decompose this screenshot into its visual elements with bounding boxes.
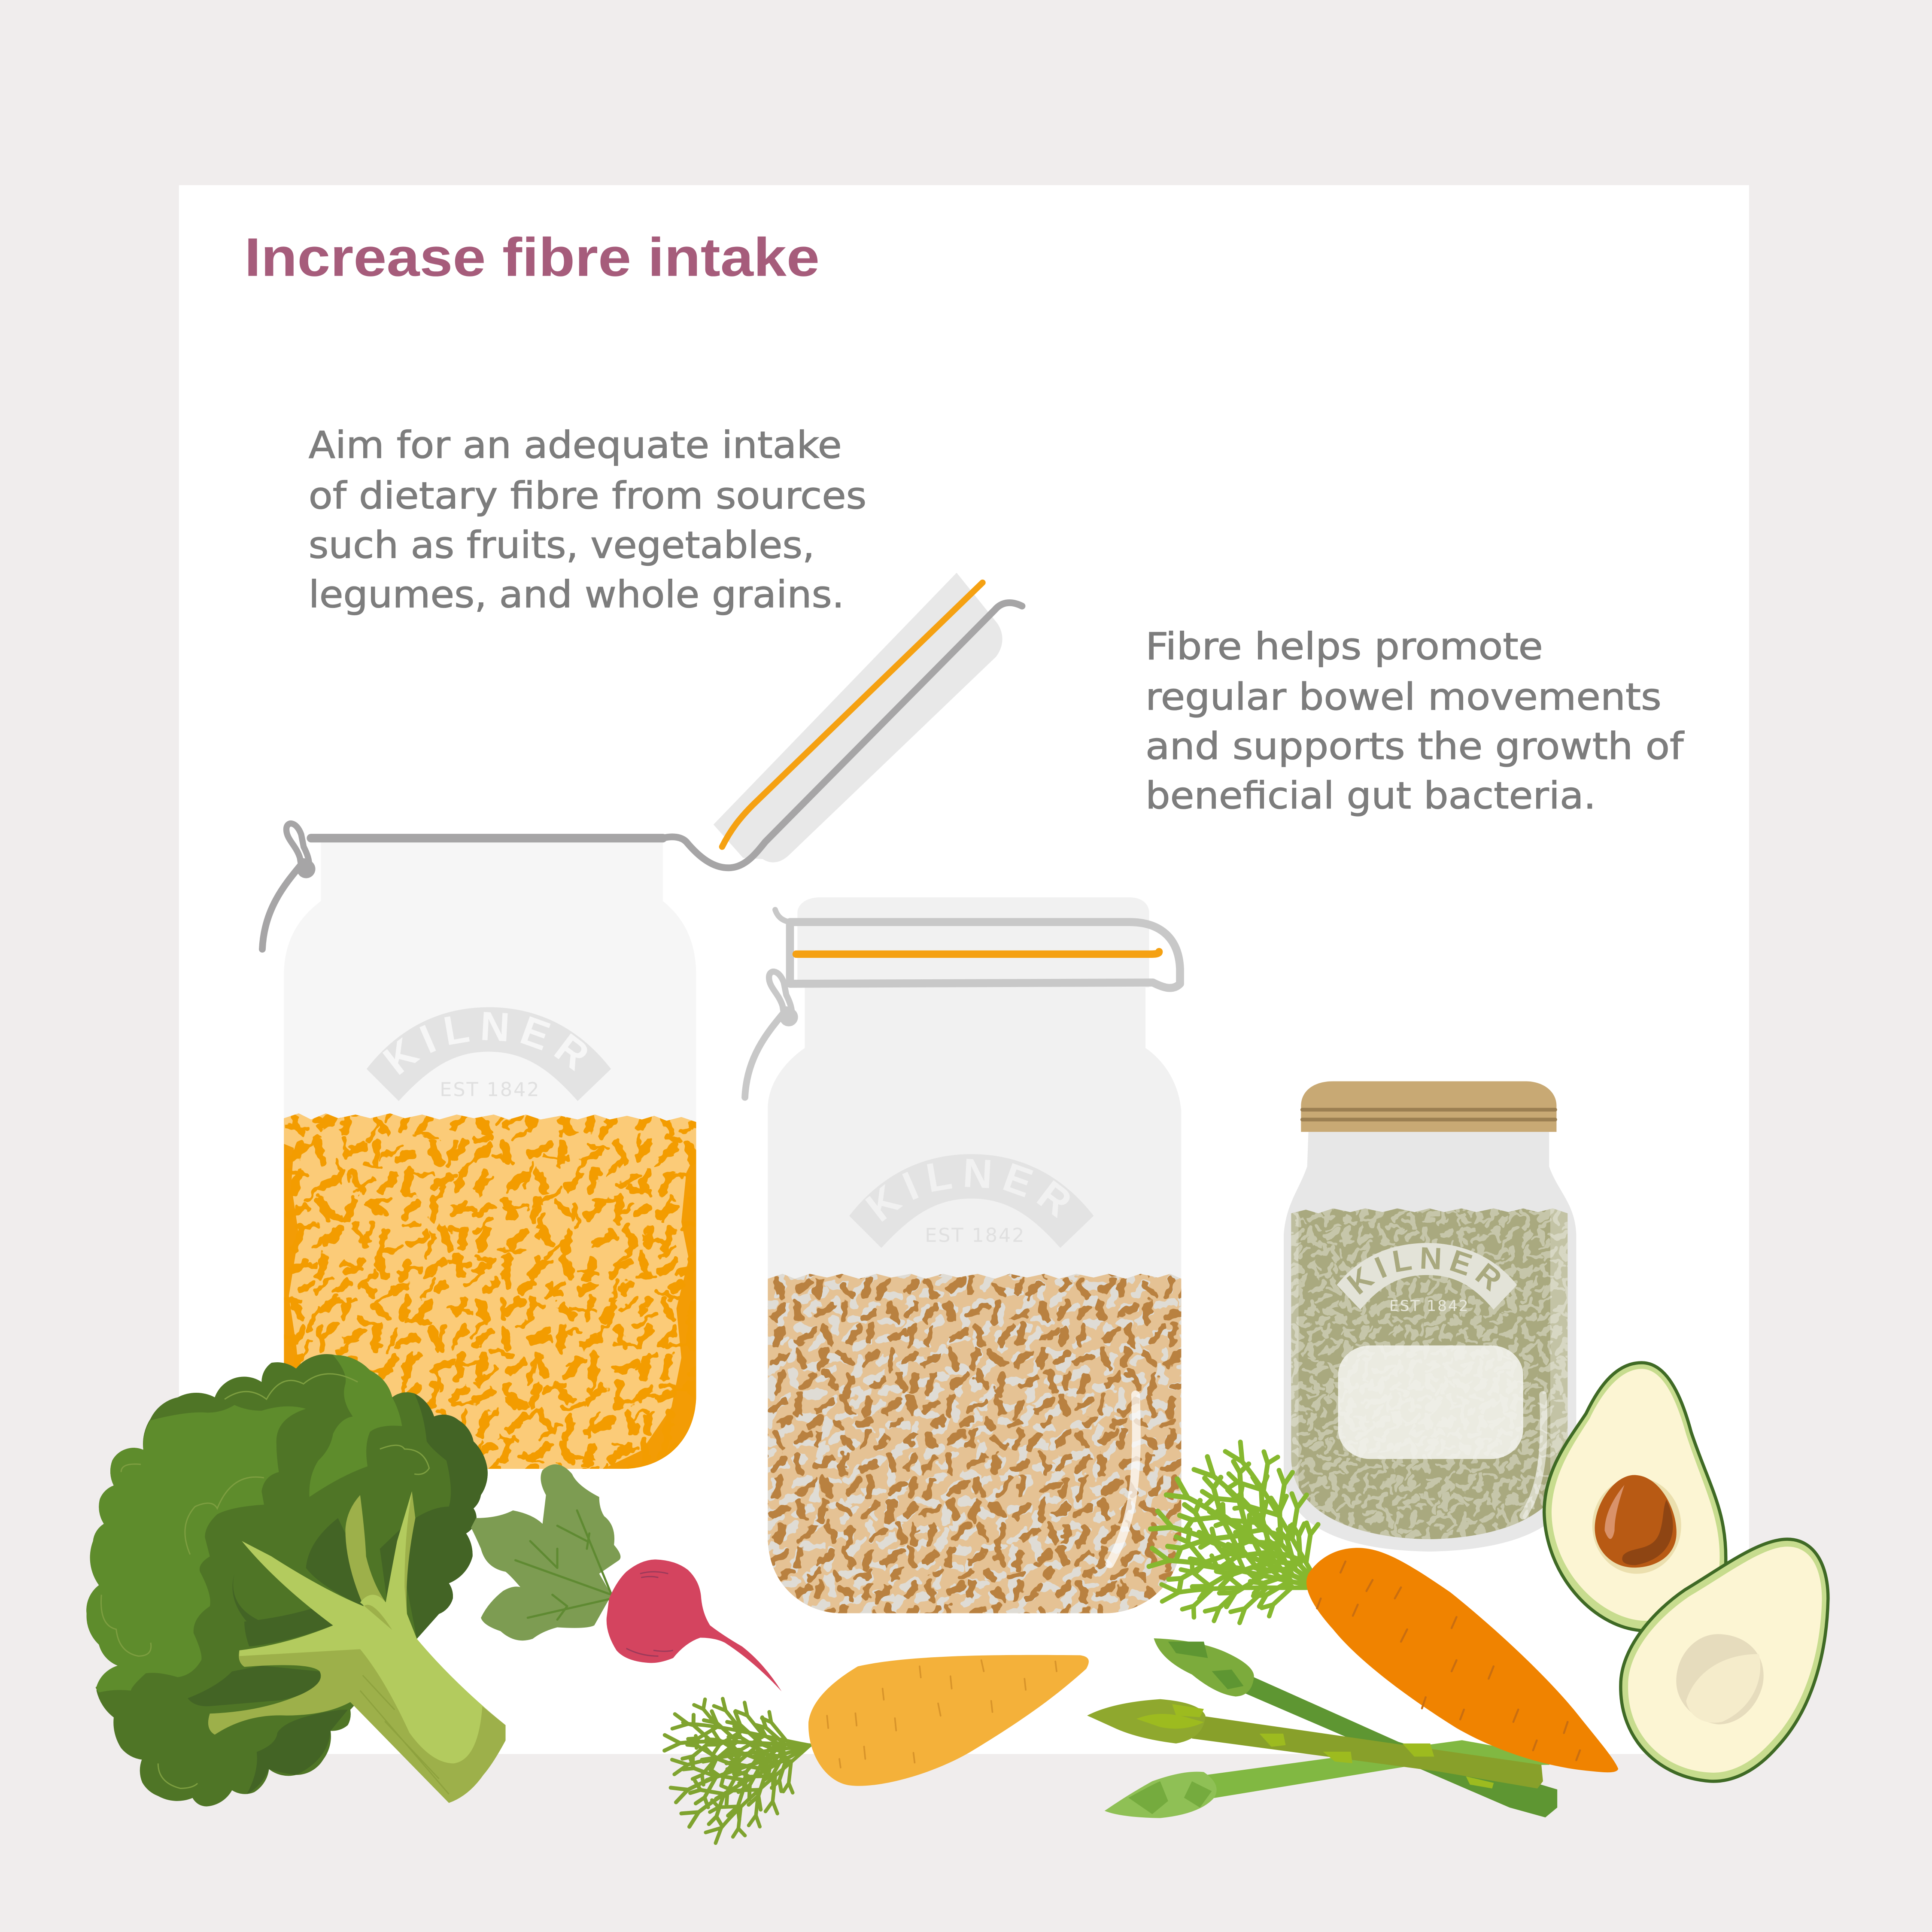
blank label xyxy=(1338,1346,1523,1459)
clasp knob xyxy=(297,860,316,878)
sweet potato fronds xyxy=(662,1691,829,1858)
broccoli stem lines xyxy=(360,1675,449,1794)
avocado hollow xyxy=(1676,1634,1764,1724)
jar: green grains, cork lid xyxy=(1284,1081,1577,1552)
sweet potato body xyxy=(808,1655,1089,1786)
open lid xyxy=(714,573,1002,863)
broccoli floret lines xyxy=(101,1374,429,1788)
text block: fibre benefits: Fibre helps promote xyxy=(1145,625,1543,668)
carrot body xyxy=(1306,1548,1618,1772)
icon: carrot with fronds xyxy=(1140,1427,1618,1772)
icon: avocado half with hollow xyxy=(1621,1539,1828,1781)
broccoli lower shadow xyxy=(188,1666,348,1794)
title: Increase fibre intake xyxy=(244,227,820,288)
radish root xyxy=(607,1559,781,1692)
broccoli stem shadow xyxy=(208,1491,506,1803)
text block: fibre benefits: beneficial gut bacteria. xyxy=(1145,775,1596,817)
white panel xyxy=(179,185,1749,1754)
cork lid xyxy=(1301,1081,1556,1132)
carrot fronds xyxy=(1140,1427,1352,1625)
broccoli top lobe xyxy=(309,1355,402,1497)
glass highlight xyxy=(1523,1395,1544,1516)
broccoli lit left side xyxy=(86,1405,306,1692)
avocado hollow light xyxy=(1686,1654,1760,1722)
avocado skin xyxy=(1621,1539,1828,1781)
text block: aim for fibre: legumes, and whole grains. xyxy=(309,574,844,617)
avocado flesh xyxy=(1628,1546,1822,1773)
orange seal xyxy=(796,952,1159,954)
text block: fibre benefits xyxy=(1145,625,1684,817)
wire and clasp xyxy=(745,910,1180,1097)
grain fill xyxy=(284,1113,696,1469)
radish leaf veins xyxy=(515,1510,611,1620)
logo: KILNER xyxy=(1341,1241,1513,1301)
olive spear xyxy=(1087,1699,1543,1789)
avocado pit crescent xyxy=(1622,1500,1673,1565)
jar glass xyxy=(768,897,1181,1613)
text block: aim for fibre: such as fruits, vegetables, xyxy=(309,524,815,567)
avocado skin xyxy=(1544,1363,1726,1631)
broccoli inner shadow xyxy=(232,1518,412,1646)
jar: brown rice, closed lid xyxy=(741,897,1210,1642)
icon: avocado half with pit xyxy=(1544,1363,1726,1631)
dark spear xyxy=(1154,1638,1557,1817)
text block: aim for fibre: of dietary fibre from sources xyxy=(309,475,866,518)
wire and clasp xyxy=(262,603,1022,949)
sweet potato marks xyxy=(827,1660,1057,1768)
radish leaves xyxy=(471,1464,620,1640)
logo: EST 1842 xyxy=(440,1078,540,1101)
text block: aim for fibre: Aim for an adequate intake xyxy=(309,424,842,467)
avocado pit highlight xyxy=(1605,1485,1625,1539)
carrot marks xyxy=(1317,1561,1580,1760)
avocado pit shadow xyxy=(1592,1477,1681,1574)
logo: EST 1842 xyxy=(1389,1297,1470,1315)
broccoli head base xyxy=(86,1354,488,1806)
grain fill xyxy=(768,1274,1182,1613)
grain fill xyxy=(1291,1208,1568,1540)
icon: sweet potato with fronds xyxy=(662,1655,1089,1858)
avocado pit xyxy=(1595,1475,1677,1567)
text block: fibre benefits: and supports the growth of xyxy=(1145,725,1684,768)
logo: KILNER xyxy=(375,1003,604,1084)
icon: broccoli xyxy=(86,1354,506,1806)
jar glass xyxy=(284,839,696,1469)
avocado flesh xyxy=(1552,1369,1719,1621)
jar: orange grains, open lid xyxy=(253,573,1022,1500)
logo: EST 1842 xyxy=(925,1224,1025,1246)
logo: KILNER xyxy=(858,1150,1087,1231)
light spear xyxy=(1105,1740,1553,1818)
text block: fibre benefits: regular bowel movements xyxy=(1145,676,1662,719)
glass highlight xyxy=(1110,1395,1136,1564)
jar glass xyxy=(1284,1132,1576,1552)
orange seal xyxy=(722,583,983,847)
icon: asparagus xyxy=(1087,1638,1557,1818)
clasp knob xyxy=(780,1008,798,1027)
broccoli stem light xyxy=(240,1491,506,1763)
radish marks xyxy=(626,1572,673,1656)
icon: radish xyxy=(471,1464,781,1692)
broccoli right shadow xyxy=(404,1394,488,1639)
text block: aim for fibre xyxy=(309,424,866,617)
